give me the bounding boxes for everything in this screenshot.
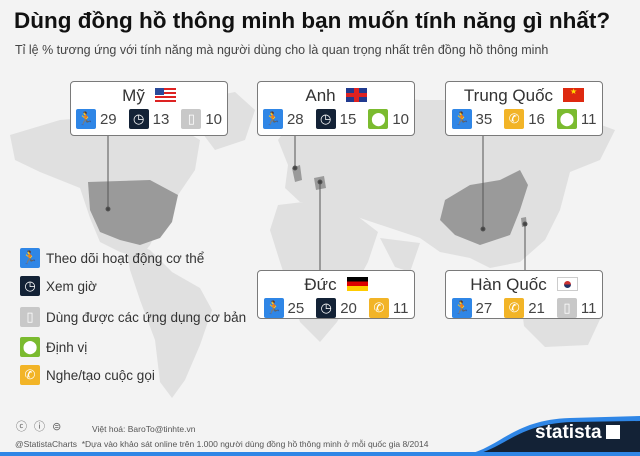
panel: Anh: 28 — [287, 110, 304, 128]
panel: Trung Quốc: 35 — [476, 110, 492, 128]
panel: Anh: Anh — [305, 86, 336, 105]
panel: Trung Quốc: 16 — [528, 110, 545, 128]
panel: Trung Quốc: ✆ — [509, 111, 520, 126]
panel: Hàn Quốc: ✆ — [509, 300, 520, 315]
legend: location — [20, 337, 87, 357]
panel: Anh — [257, 81, 415, 136]
panel: Đức: 25 — [288, 300, 304, 316]
panel: Đức: 20 — [340, 300, 357, 316]
highlighted countries — [88, 165, 528, 245]
panel: Đức: 🏃 — [265, 300, 282, 315]
panel: Anh: 10 — [392, 110, 409, 128]
panel: Đức: ✆ — [373, 300, 384, 315]
panel: Mỹ — [70, 81, 228, 136]
bottom strip — [0, 452, 640, 456]
panel: Mỹ: 13 — [153, 110, 169, 128]
panel: Anh: 🏃 — [265, 111, 281, 126]
legend: calls: Nghe/tạo cuộc gọi — [46, 368, 155, 382]
panel: Trung Quốc: 11 — [581, 110, 596, 128]
panel: Trung Quốc — [445, 81, 603, 136]
panel: Đức: Đức — [304, 275, 337, 294]
panel: Mỹ: ◷ — [133, 111, 144, 126]
connector lines — [106, 136, 527, 270]
panel: Mỹ: 🏃 — [78, 111, 94, 126]
legend: apps: Dùng được các ứng dụng cơ bản — [46, 310, 246, 324]
panel: Hàn Quốc: 21 — [528, 300, 545, 316]
panel: Trung Quốc: ★ — [570, 87, 577, 96]
panel: Anh: 15 — [340, 110, 356, 128]
panel: Hàn Quốc: ▯ — [563, 300, 570, 315]
panel: Anh: ◷ — [320, 111, 331, 126]
panel: Hàn Quốc: 27 — [476, 300, 492, 316]
legend: location: Định vị — [46, 340, 87, 354]
panel: Trung Quốc: 🏃 — [453, 111, 470, 126]
legend: calls — [20, 365, 155, 385]
panel: Đức: ◷ — [321, 300, 332, 315]
panel: Hàn Quốc: 🏃 — [453, 300, 470, 315]
title: Dùng đồng hồ thông minh bạn muốn tính năng gì nhất? — [14, 8, 610, 33]
legend: location: ⬤ — [23, 339, 37, 354]
panel: Mỹ: 10 — [205, 110, 222, 128]
panel: Hàn Quốc — [445, 270, 603, 319]
legend: time: ◷ — [24, 278, 36, 293]
legend: time: Xem giờ — [46, 278, 97, 294]
legend: activity: Theo dõi hoạt động cơ thể — [46, 250, 204, 266]
subtitle: Tỉ lệ % tương ứng với tính năng mà người dùng cho là quan trọng nhất trên đồng hồ thông minh — [15, 43, 548, 57]
footer: source: @StatistaCharts *Dựa vào khảo sát online trên 1.000 người dùng đồng hồ thông minh ở mỗi quốc gia 8/2014 — [15, 439, 428, 449]
footer: cc icons: ⓒ ⓘ ⊜ — [16, 421, 63, 433]
panel: Trung Quốc: Trung Quốc — [464, 86, 553, 105]
footer: credits: Việt hoá: BaroTo@tinhte.vn — [92, 424, 195, 434]
panel: Anh: ⬤ — [371, 111, 386, 126]
panel: Hàn Quốc: 11 — [581, 300, 596, 316]
panel: Mỹ: ▯ — [188, 111, 195, 126]
panel: Mỹ: Mỹ — [122, 86, 145, 105]
statista logo: statista — [535, 422, 602, 443]
legend: time — [20, 276, 97, 296]
legend: apps: ▯ — [26, 309, 34, 324]
statista logo band — [476, 416, 640, 452]
panel: Hàn Quốc: Hàn Quốc — [470, 275, 547, 294]
legend — [20, 248, 246, 385]
panel: Mỹ: 29 — [100, 110, 117, 128]
panel: Đức — [257, 270, 415, 319]
legend: calls: ✆ — [25, 367, 35, 382]
panel: Đức: 11 — [393, 300, 408, 316]
legend: activity — [20, 248, 204, 268]
legend: apps — [20, 307, 246, 327]
panel: Trung Quốc: ⬤ — [560, 111, 574, 126]
legend: activity: 🏃 — [22, 250, 38, 265]
